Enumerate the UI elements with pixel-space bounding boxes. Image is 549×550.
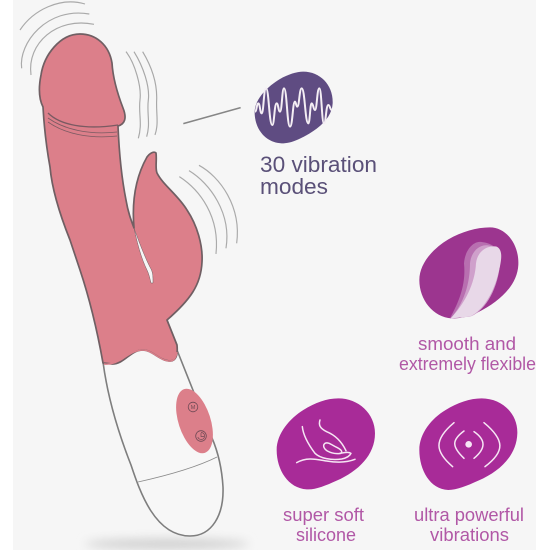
handle seam — [138, 457, 217, 482]
pointer line — [183, 108, 241, 124]
product illustration — [39, 34, 223, 536]
control panel — [169, 384, 220, 458]
feature: super soft silicone — [277, 398, 375, 545]
label — [414, 505, 524, 545]
label: super soft — [283, 505, 364, 525]
gap between shaft and arm — [134, 228, 153, 283]
pink base edge cover — [104, 350, 177, 364]
head ridge lines — [48, 113, 118, 137]
label: vibrations — [430, 525, 509, 545]
label: 30 vibration — [260, 152, 377, 177]
icon: vibration blob — [419, 398, 517, 490]
label: smooth and — [418, 334, 516, 354]
feature: ultra powerful vibrations — [414, 398, 524, 545]
motion arcs and pointer — [20, 2, 241, 254]
feature: 30 vibration modes — [255, 72, 377, 199]
control panel: M — [191, 405, 196, 411]
icon: hand blob — [277, 398, 375, 489]
arcs: arm — [179, 165, 237, 254]
label: ultra powerful — [414, 505, 524, 525]
label: extremely flexible — [399, 354, 536, 374]
label — [260, 152, 377, 199]
icon: flexing blob — [419, 227, 518, 318]
label: silicone — [296, 525, 356, 545]
wiggles: shaft side — [126, 52, 157, 138]
label — [283, 505, 364, 545]
floor shadow — [85, 539, 249, 549]
label — [399, 334, 536, 374]
pink silicone body — [39, 34, 202, 364]
label: modes — [260, 174, 328, 199]
arcs: shaft top — [20, 2, 94, 75]
product handle — [103, 320, 223, 536]
icon: waveform blob — [255, 72, 333, 143]
feature: smooth and flexible — [399, 227, 536, 374]
